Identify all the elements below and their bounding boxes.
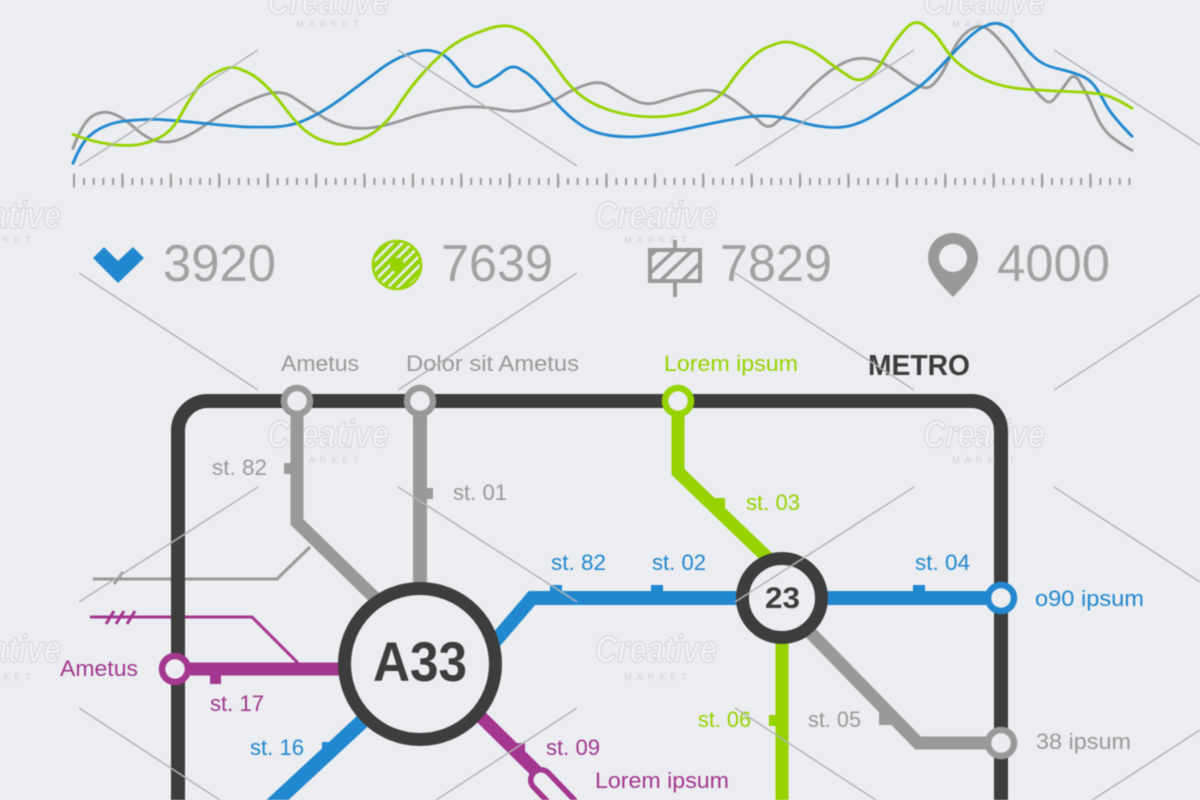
blue series xyxy=(73,23,1132,163)
ruler axis ticks xyxy=(73,180,1134,182)
stat: 4000 xyxy=(928,233,1110,297)
watermark: Creative Market: MARKET xyxy=(624,672,692,682)
gray labels: st. 05 xyxy=(808,707,861,732)
hub 23: 23 xyxy=(765,582,800,615)
blue labels: o90 ipsum xyxy=(1035,586,1144,611)
stat: 7829: 7829 xyxy=(720,235,832,293)
icon: hatched resistor box xyxy=(648,240,702,298)
watermark: Creative Market: MARKET xyxy=(952,19,1020,29)
blue labels: st. 16 xyxy=(250,735,304,760)
blue labels: st. 04 xyxy=(915,550,970,575)
purple labels xyxy=(60,656,729,793)
green series xyxy=(73,23,1132,145)
icon: map pin xyxy=(928,233,978,297)
green labels: Lorem ipsum xyxy=(664,351,798,376)
purple labels: Lorem ipsum xyxy=(595,768,729,793)
stat: 3920 xyxy=(93,235,276,293)
gray labels: Dolor sit Ametus xyxy=(406,351,579,376)
blue line lower left xyxy=(272,716,368,800)
station ring: Dolor sit Ametus xyxy=(407,388,433,414)
gray labels: st. 01 xyxy=(453,480,507,505)
title: METRO: METRO xyxy=(868,350,970,382)
gray labels: st. 82 xyxy=(212,455,267,480)
metro labels xyxy=(60,350,1144,793)
stat: 7639 xyxy=(373,235,553,293)
watermark: Creative Market: Creative xyxy=(595,629,717,671)
purple capsule station xyxy=(541,780,566,800)
gray line from Dolor sit Ametus xyxy=(420,401,433,590)
station ring: Lorem ipsum green xyxy=(665,388,691,414)
station ring: Ametus purple xyxy=(162,656,188,682)
icon: green hatched circle xyxy=(373,241,421,289)
hub A33: A33 xyxy=(373,630,467,693)
watermark: Creative Market: MARKET xyxy=(296,455,364,465)
blue line xyxy=(490,585,1001,647)
gray labels: 38 ipsum xyxy=(1036,729,1131,754)
stat: 7829 xyxy=(648,240,830,298)
blue labels: st. 82 xyxy=(551,550,606,575)
watermark: Creative Market: Creative xyxy=(267,414,389,456)
blue labels xyxy=(250,550,1144,760)
gray labels xyxy=(212,351,1131,754)
purple labels: st. 09 xyxy=(546,735,600,760)
watermark: Creative Market: MARKET xyxy=(952,455,1020,465)
thin gray branch xyxy=(93,547,310,584)
blue labels: st. 02 xyxy=(652,550,706,575)
purple line to Ametus xyxy=(175,669,345,684)
gray series xyxy=(73,26,1132,150)
gray labels: Ametus xyxy=(281,351,359,376)
station ring: o90 ipsum xyxy=(988,585,1014,611)
green line top xyxy=(678,401,772,562)
purple line lower right xyxy=(478,714,540,775)
gray line from Ametus xyxy=(284,401,380,603)
gray line to 38 ipsum xyxy=(800,622,1001,743)
station ring: 38 ipsum xyxy=(988,730,1014,756)
hub A33 xyxy=(344,588,496,740)
green line bottom xyxy=(769,630,782,800)
watermark: Creative Market xyxy=(0,0,1045,682)
line chart: three smooth curves xyxy=(73,23,1132,163)
watermark: Creative Market: MARKET xyxy=(624,235,692,245)
watermark: Creative Market: MARKET xyxy=(296,19,364,29)
purple labels: Ametus xyxy=(60,656,138,681)
purple labels: st. 17 xyxy=(210,691,264,716)
green labels xyxy=(664,351,800,732)
green labels: st. 06 xyxy=(698,707,751,732)
station ring: Ametus gray xyxy=(284,388,310,414)
stat: 3920: 3920 xyxy=(163,235,276,293)
metro map xyxy=(90,388,1014,800)
stat: 4000: 4000 xyxy=(997,235,1110,293)
dark frame line xyxy=(178,401,1001,800)
watermark: Creative Market: Creative xyxy=(595,195,717,237)
icon: blue chevron xyxy=(93,247,144,283)
thin purple branch xyxy=(90,611,298,663)
watermark: Creative Market: Creative xyxy=(923,414,1045,456)
hub 23 xyxy=(742,558,822,638)
stat: 7639: 7639 xyxy=(441,235,553,293)
green labels: st. 03 xyxy=(746,490,800,515)
